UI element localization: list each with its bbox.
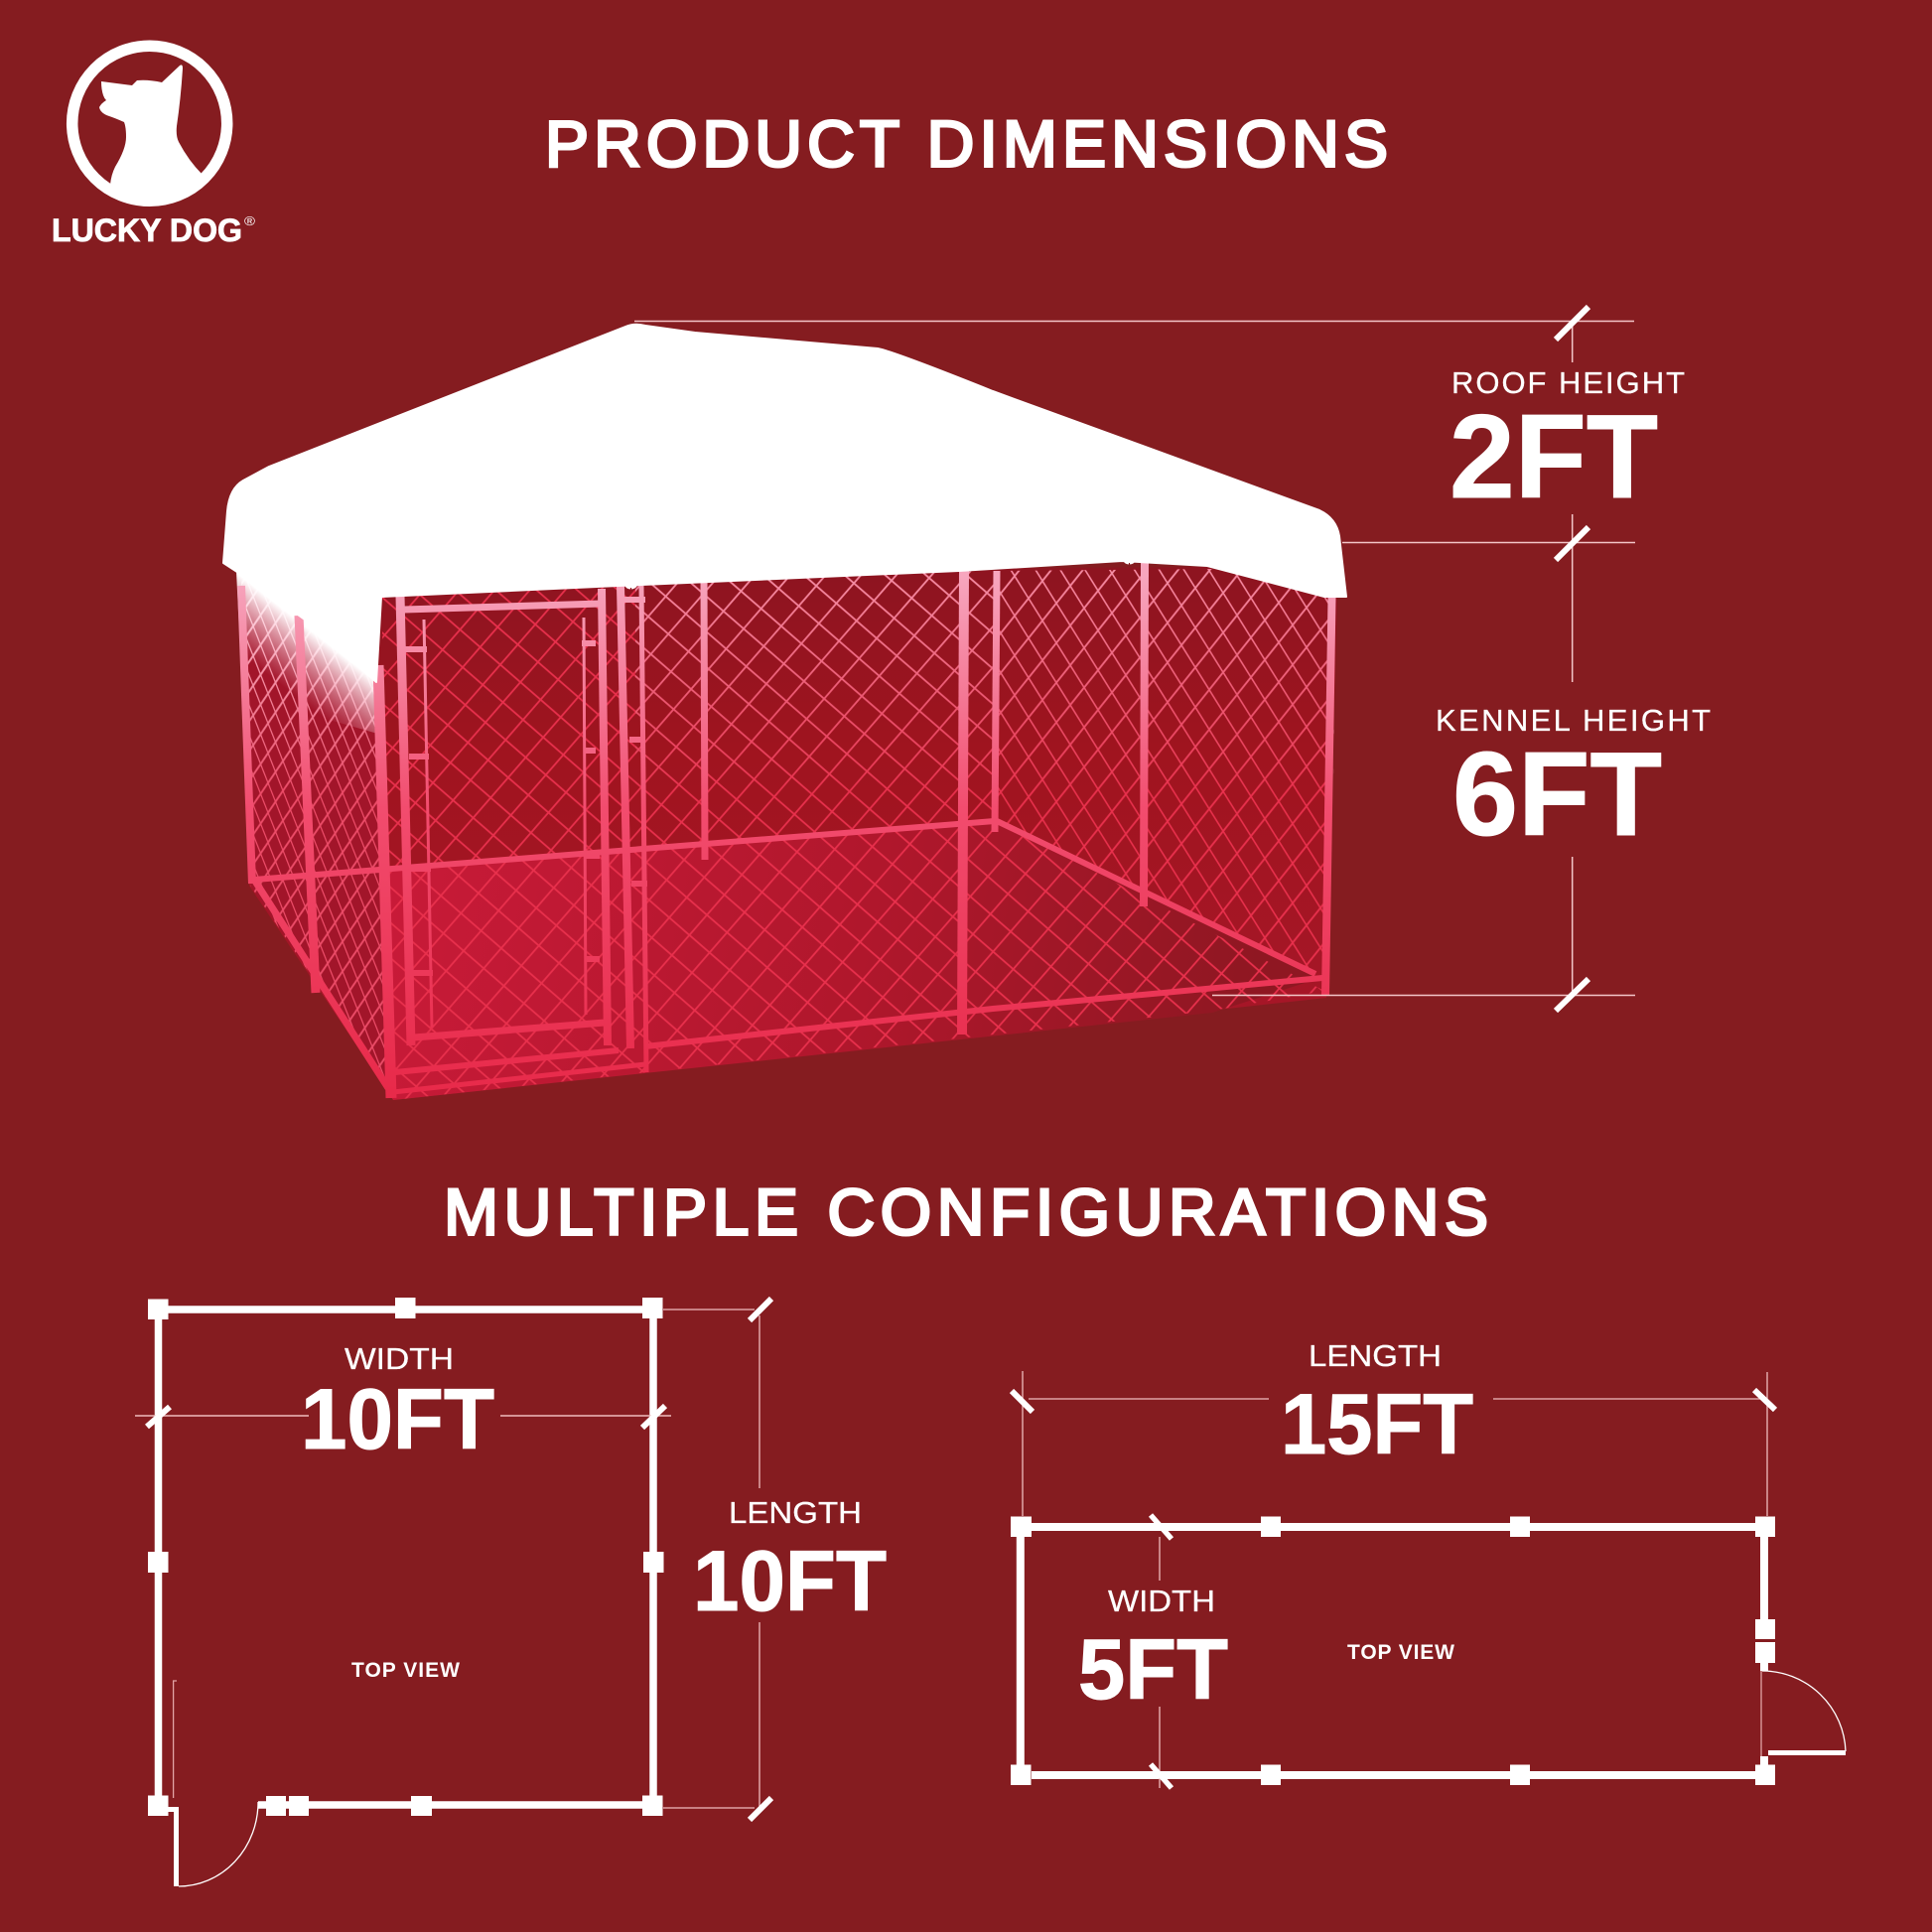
length ticks (750, 1299, 771, 1820)
roof (223, 325, 1346, 682)
width ticks (1151, 1515, 1172, 1788)
length caption: LENGTH (1309, 1338, 1442, 1373)
width value: 10FT (301, 1372, 494, 1467)
floor plan: 15ft by 5ft (1011, 1338, 1846, 1788)
dimension ticks (1556, 307, 1588, 1011)
right corner post (1325, 568, 1332, 995)
door inner frame (424, 618, 586, 1028)
pale upper wire highlights (241, 568, 1334, 794)
length caption: LENGTH (729, 1495, 862, 1530)
width caption: WIDTH (1108, 1584, 1215, 1618)
roof and kennel height dimension lines (634, 307, 1635, 1011)
roof height value: 2FT (1449, 390, 1658, 523)
top view label: TOP VIEW (351, 1659, 460, 1682)
front left post (378, 665, 391, 1098)
short post (704, 578, 705, 860)
door right tube (602, 589, 608, 1045)
door left tube (400, 596, 411, 1045)
registered mark: ® (244, 213, 255, 228)
right mid post (1144, 561, 1145, 906)
kennel floor (252, 820, 1320, 1100)
pale front wire (635, 571, 998, 794)
kennel illustration (223, 325, 1346, 1100)
double post left (621, 586, 630, 1048)
width dimension line (1159, 1537, 1161, 1788)
length value: 15FT (1281, 1377, 1473, 1472)
door swing arc (179, 1802, 258, 1886)
door leaf (1768, 1750, 1846, 1755)
plan walls (1021, 1527, 1764, 1775)
length ticks (1012, 1390, 1775, 1412)
left mid post (299, 616, 316, 993)
right side chain-link mesh (995, 568, 1334, 978)
plan walls (159, 1310, 653, 1805)
door top rail (404, 604, 602, 610)
roof fastening hooks (625, 551, 1136, 588)
kennel height caption: KENNEL HEIGHT (1436, 703, 1711, 738)
pale left wire (242, 582, 375, 780)
length dimension line (1023, 1371, 1767, 1516)
double post right (641, 586, 646, 1072)
roof height caption: ROOF HEIGHT (1451, 365, 1685, 400)
label: kennel height (1436, 703, 1711, 861)
floor plan: 10ft by 10ft (135, 1298, 887, 1886)
width ticks (147, 1406, 665, 1428)
title: multiple configurations: MULTIPLE CONFIGURATIONS (444, 1175, 1488, 1249)
top view label: TOP VIEW (1347, 1641, 1454, 1664)
white fade under roof on left wall (236, 571, 381, 735)
door guide line (174, 1681, 177, 1798)
right rail (995, 820, 1315, 974)
rear rail (254, 821, 995, 880)
plan posts (148, 1298, 663, 1816)
length dimension line (663, 1310, 759, 1808)
door leaf (168, 1809, 177, 1886)
door guide line (1760, 1671, 1762, 1756)
kennel height value: 6FT (1452, 728, 1662, 861)
front and floor chain-link mesh (381, 571, 1324, 1100)
outer bottom rail (393, 1064, 645, 1092)
logo: Lucky Dog (52, 46, 255, 248)
icon: dog silhouette (99, 65, 203, 200)
back corner post (995, 571, 997, 832)
left posts (241, 586, 252, 884)
width caption: WIDTH (345, 1341, 454, 1376)
left side wire pattern (241, 576, 393, 1097)
logo circle (72, 46, 227, 201)
door bottom rail (414, 1023, 605, 1037)
length value: 10FT (693, 1534, 887, 1629)
pale right wire (998, 568, 1334, 794)
rail left back (254, 880, 388, 1088)
front bottom rail (395, 978, 1322, 1072)
title: product dimensions: PRODUCT DIMENSIONS (545, 107, 1388, 181)
logo wordmark: LUCKY DOG (52, 212, 242, 248)
roof top line (634, 322, 1635, 995)
door hinges and cross pieces (405, 600, 647, 973)
label: roof height (1449, 365, 1685, 523)
kennel body shading (239, 566, 1338, 1100)
width dimension line (135, 1415, 671, 1417)
vertical dimension line (1572, 323, 1574, 995)
left side wall (241, 576, 393, 1097)
center post (962, 571, 964, 1035)
door swing arc (1762, 1671, 1846, 1751)
kennel frame tubes (241, 561, 1332, 1098)
plan posts (1011, 1517, 1775, 1785)
width value: 5FT (1078, 1622, 1228, 1718)
